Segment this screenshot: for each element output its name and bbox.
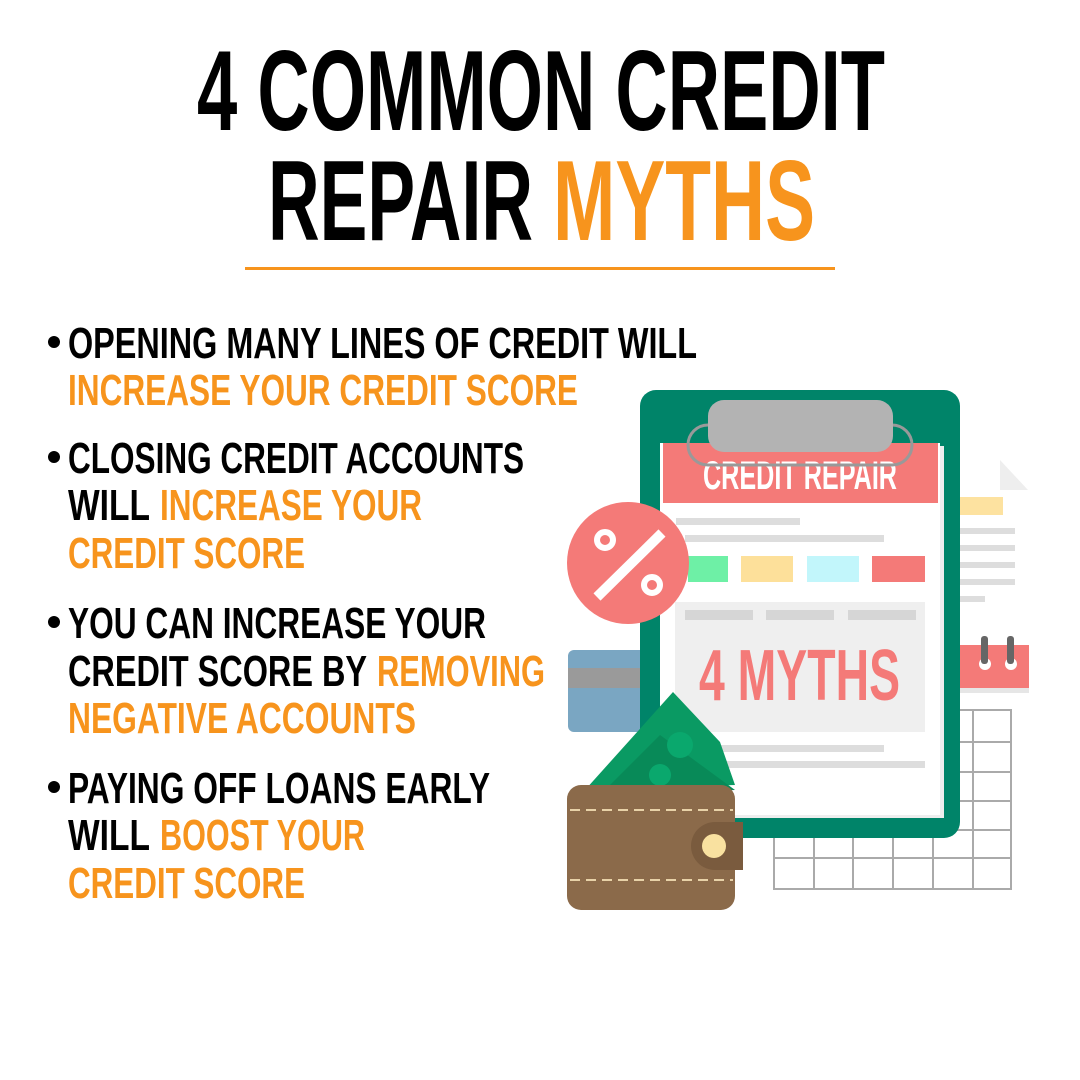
myth 3: CREDIT SCORE BY xyxy=(68,647,367,696)
calendar xyxy=(955,636,1029,693)
myth 4: WILL xyxy=(68,811,150,860)
clipboard board xyxy=(640,390,960,838)
illustration: credit repair clipboard xyxy=(567,390,1029,910)
myth 3: REMOVING xyxy=(377,647,545,696)
paper xyxy=(660,443,944,818)
percent badge xyxy=(567,502,689,624)
myth 4: BOOST YOUR xyxy=(160,811,365,860)
myth 1 xyxy=(48,319,697,415)
myth 3: YOU CAN INCREASE YOUR xyxy=(68,599,486,648)
title xyxy=(197,28,885,265)
myth 1: OPENING MANY LINES OF CREDIT WILL xyxy=(68,319,697,368)
paper: 4 MYTHS xyxy=(699,636,900,716)
myth 2: CREDIT SCORE xyxy=(68,529,305,578)
myth 4: PAYING OFF LOANS EARLY xyxy=(68,764,490,813)
paper: CREDIT REPAIR xyxy=(703,454,897,498)
myth 4 xyxy=(48,764,490,908)
myth 3: NEGATIVE ACCOUNTS xyxy=(68,694,416,743)
title: REPAIR xyxy=(268,138,533,265)
myth 4: CREDIT SCORE xyxy=(68,859,305,908)
clip xyxy=(688,400,912,465)
background document xyxy=(950,460,1028,610)
wallet with money xyxy=(567,692,743,910)
bullet list: myths xyxy=(48,319,697,908)
myth 1: INCREASE YOUR CREDIT SCORE xyxy=(68,366,578,415)
myth 2: INCREASE YOUR xyxy=(160,481,422,530)
myth 2: WILL xyxy=(68,481,150,530)
myth 3 xyxy=(48,599,545,743)
credit card xyxy=(568,650,648,732)
title: MYTHS xyxy=(553,138,815,265)
myth 2 xyxy=(48,434,524,578)
table xyxy=(774,710,1011,889)
myth 2: CLOSING CREDIT ACCOUNTS xyxy=(68,434,524,483)
